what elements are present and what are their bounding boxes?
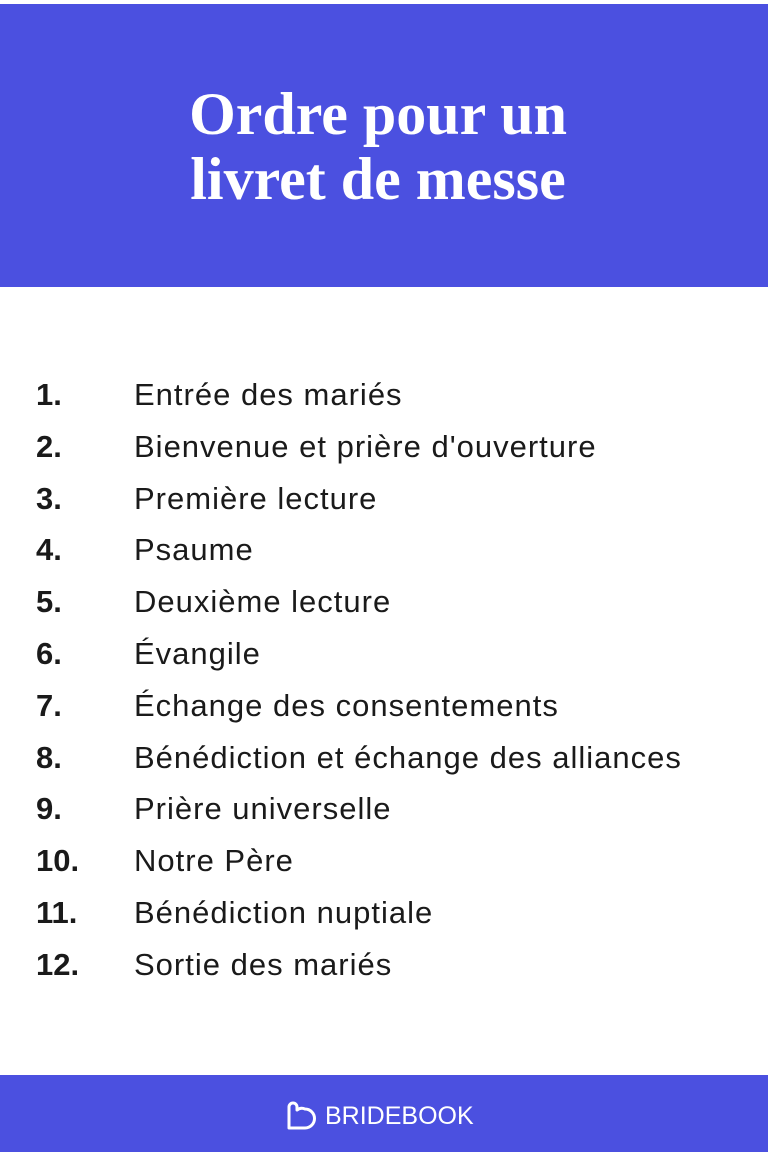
item 4: 4. xyxy=(36,532,62,567)
item 6 xyxy=(36,636,261,671)
item 12: Sortie des mariés xyxy=(134,947,392,982)
item 11: 11. xyxy=(36,895,77,930)
item 3: 3. xyxy=(36,481,62,516)
item 9: 9. xyxy=(36,791,62,826)
icon: heart xyxy=(288,1102,316,1130)
item 2: 2. xyxy=(36,429,62,464)
item 11: Bénédiction nuptiale xyxy=(134,895,433,930)
item 5: 5. xyxy=(36,584,62,619)
item 10 xyxy=(36,843,294,878)
item 2: Bienvenue et prière d'ouverture xyxy=(134,429,597,464)
title xyxy=(189,81,567,212)
title: livret de messe xyxy=(190,146,566,212)
item 7: 7. xyxy=(36,688,62,723)
text: BRIDEBOOK xyxy=(325,1102,474,1130)
item 8: Bénédiction et échange des alliances xyxy=(134,740,682,775)
item 7: Échange des consentements xyxy=(134,688,559,723)
item 6: 6. xyxy=(36,636,62,671)
item 12: 12. xyxy=(36,947,79,982)
footer band xyxy=(0,1075,768,1152)
item 10: 10. xyxy=(36,843,79,878)
item 1: 1. xyxy=(36,377,62,412)
item 8: 8. xyxy=(36,740,62,775)
item 9: Prière universelle xyxy=(134,791,392,826)
item 10: Notre Père xyxy=(134,843,294,878)
title: Ordre pour un xyxy=(189,81,567,147)
item 4: Psaume xyxy=(134,532,254,567)
item 4 xyxy=(36,532,254,567)
item 1: Entrée des mariés xyxy=(134,377,403,412)
header panel xyxy=(0,4,768,287)
item 5: Deuxième lecture xyxy=(134,584,391,619)
item 6: Évangile xyxy=(134,636,261,671)
list of mass order steps xyxy=(36,377,682,982)
item 3: Première lecture xyxy=(134,481,377,516)
logo: bridebook xyxy=(288,1102,474,1130)
